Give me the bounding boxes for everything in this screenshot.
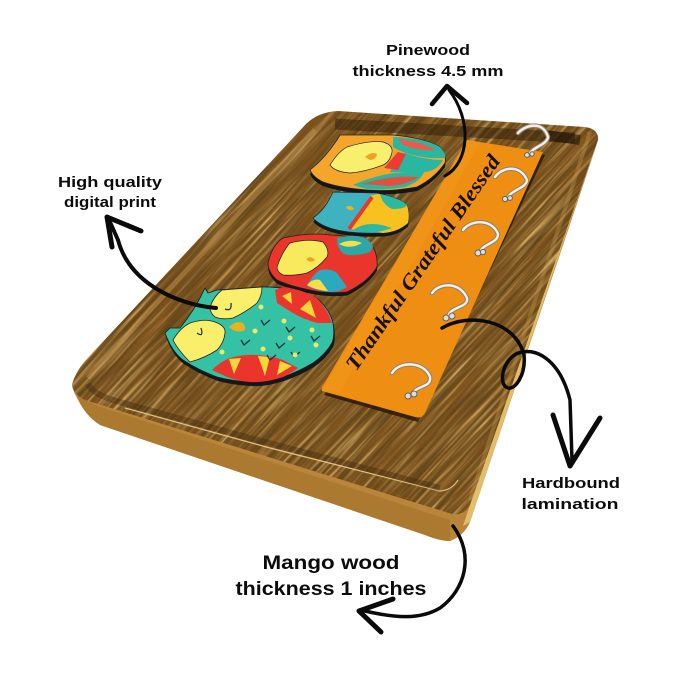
label: Pinewood: Pinewood — [386, 42, 470, 59]
label: Hardbound lamination — [522, 475, 620, 513]
tray inner rim — [125, 408, 458, 491]
arrow: to High quality digital print — [107, 217, 216, 308]
arrow: to Hardbound lamination — [442, 320, 600, 466]
label: Hardbound lamination: Hardbound — [522, 475, 620, 492]
label: Mango wood thickness — [236, 553, 426, 600]
owl: blue — [313, 192, 409, 237]
label: Mango wood thickness: Mango wood — [262, 553, 400, 574]
arrow: to Mango wood — [359, 526, 465, 632]
banner text: Thankful Grateful Blessed — [340, 150, 505, 375]
label: Pinewood — [352, 42, 504, 80]
owl: red — [268, 234, 377, 296]
tray side edge — [72, 135, 600, 541]
tray top surface — [72, 111, 598, 514]
silver hooks — [392, 126, 548, 399]
owl: top orange — [310, 135, 445, 195]
arrow: to Pinewood — [432, 86, 467, 176]
label: Mango wood thickness: thickness 1 inches — [236, 579, 426, 600]
label: Hardbound lamination: lamination — [522, 496, 618, 513]
wooden tray — [72, 111, 600, 541]
label: High quality digital print: High quality — [58, 174, 163, 191]
label: Pinewood: thickness 4.5 mm — [352, 63, 504, 80]
label: High quality digital print — [58, 174, 163, 211]
label: High quality digital print: digital print — [64, 194, 156, 211]
banner: orange hook board — [322, 126, 548, 422]
owl: large teal — [165, 287, 335, 386]
